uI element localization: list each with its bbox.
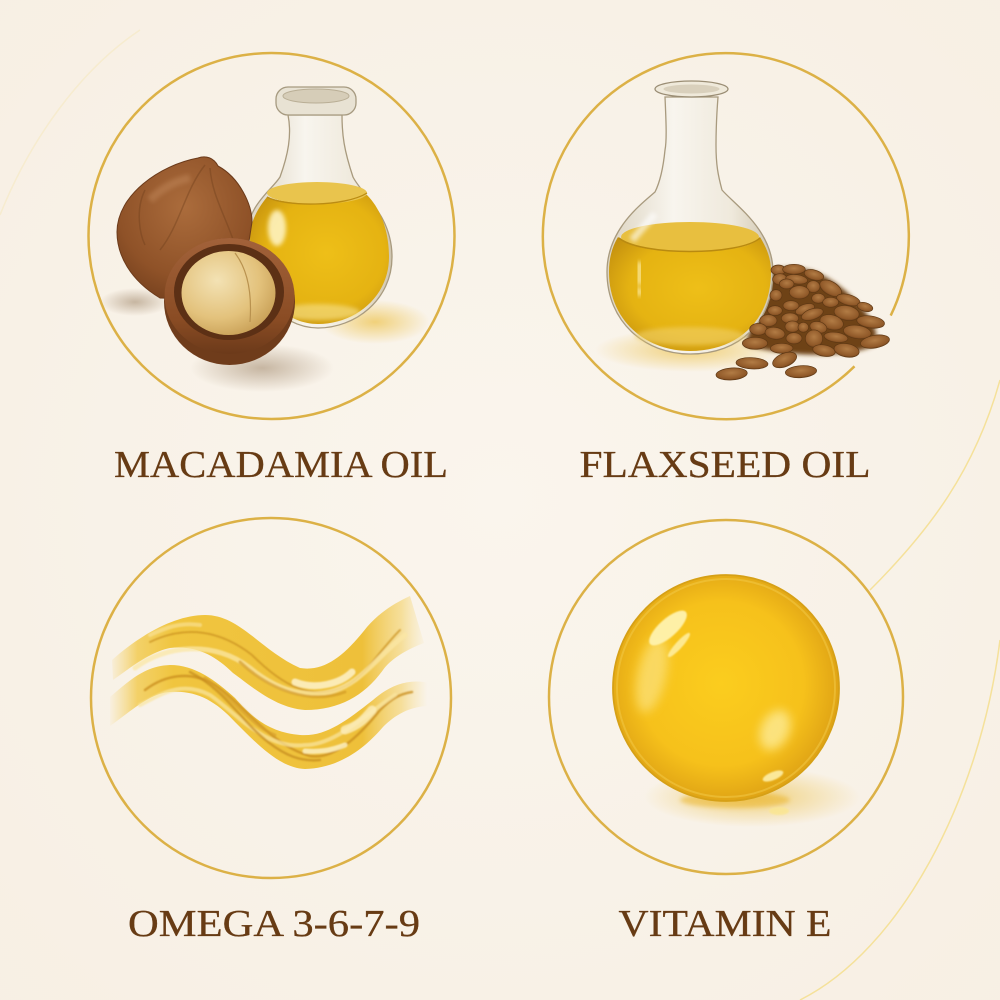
panel: omega 3-6-7-9 [91, 518, 451, 878]
heading: vitamin e: VITAMIN E [618, 903, 832, 945]
panel: flaxseed oil [543, 53, 909, 419]
circle frame [549, 520, 903, 874]
heading: flaxseed oil: FLAXSEED OIL [580, 444, 870, 486]
circle frame [543, 53, 909, 419]
illustration: vitamin e capsule [613, 575, 860, 827]
flaxseeds [716, 264, 891, 381]
circle frame [91, 518, 451, 878]
panel: macadamia oil [88, 53, 454, 419]
illustration: macadamia nuts and bottle [100, 87, 430, 392]
illustration: golden oil waves [110, 596, 433, 769]
heading: omega 3-6-7-9: OMEGA 3-6-7-9 [128, 903, 420, 945]
circle frame [88, 53, 454, 419]
heading: macadamia oil: MACADAMIA OIL [114, 444, 448, 486]
illustration: flask and flaxseeds [595, 81, 891, 381]
panel: vitamin e [549, 520, 903, 874]
